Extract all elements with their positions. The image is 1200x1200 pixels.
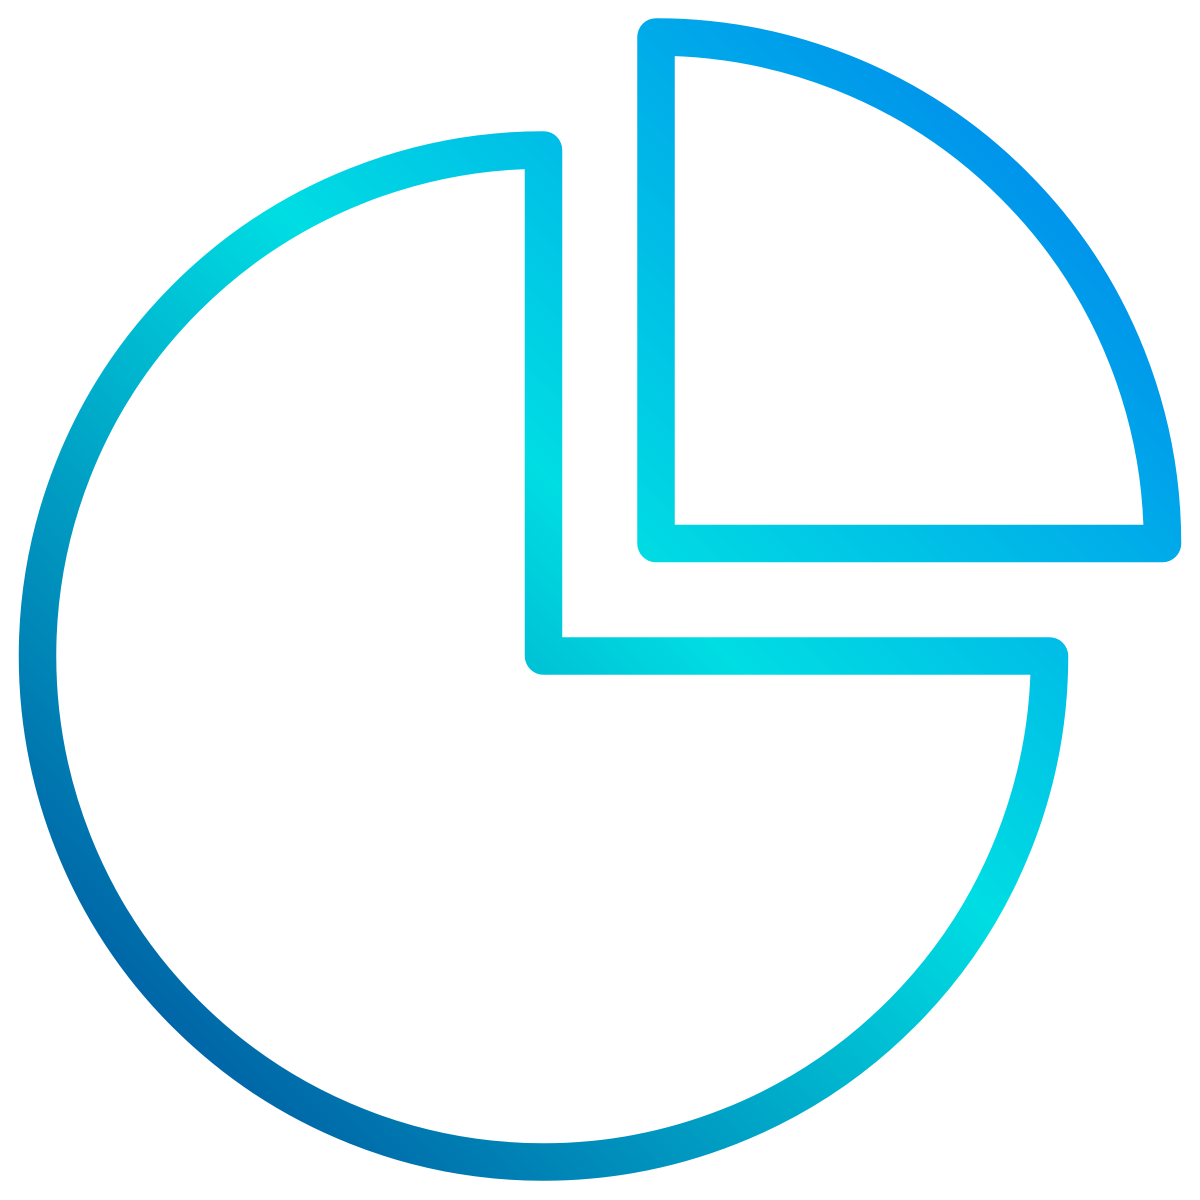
detached pie slice [656, 37, 1162, 544]
main pie body with missing quarter [38, 150, 1049, 1162]
